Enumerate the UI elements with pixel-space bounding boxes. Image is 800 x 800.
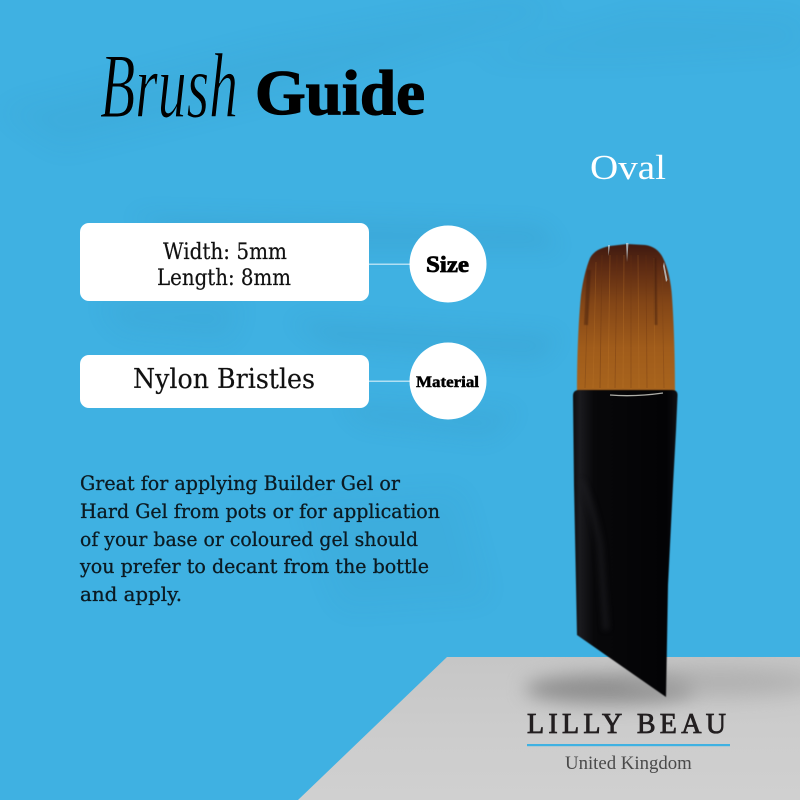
title bbox=[100, 35, 425, 137]
material panel bbox=[80, 355, 369, 408]
size connector bbox=[369, 264, 413, 265]
title script word: Brush bbox=[100, 35, 238, 137]
material panel: Nylon Bristles bbox=[133, 364, 315, 395]
title bold word: Guide bbox=[255, 57, 425, 128]
material badge bbox=[410, 342, 486, 420]
size values bbox=[157, 240, 291, 291]
bristle tip gaps bbox=[608, 243, 668, 282]
material connector bbox=[369, 380, 413, 382]
brush bbox=[573, 243, 678, 697]
material row bbox=[80, 342, 486, 420]
description: and apply. bbox=[80, 582, 182, 606]
ferrule bbox=[573, 390, 678, 697]
size panel bbox=[80, 223, 369, 301]
description: Great for applying Builder Gel or bbox=[80, 471, 400, 495]
description: you prefer to decant from the bottle bbox=[79, 554, 429, 578]
logo bbox=[527, 709, 730, 774]
floor shadow bbox=[525, 668, 800, 704]
logo location: United Kingdom bbox=[565, 753, 692, 774]
logo name: LILLY BEAU bbox=[527, 709, 730, 740]
material badge: Material bbox=[416, 374, 480, 391]
size badge: Size bbox=[426, 252, 469, 277]
size badge bbox=[410, 226, 486, 302]
grey floor bbox=[298, 657, 800, 800]
description bbox=[79, 471, 440, 606]
bristles bbox=[577, 243, 675, 392]
palm leaf shadows bbox=[0, 0, 800, 610]
size row bbox=[80, 223, 486, 302]
description: of your base or coloured gel should bbox=[80, 527, 418, 551]
ferrule highlight bbox=[610, 393, 663, 396]
description: Hard Gel from pots or for application bbox=[80, 499, 440, 523]
bristle dark roots bbox=[586, 258, 656, 325]
size values: Length: 8mm bbox=[157, 266, 291, 291]
brush name: Oval bbox=[590, 148, 666, 187]
ferrule reflection bbox=[591, 504, 608, 628]
logo rule bbox=[527, 744, 730, 746]
size values: Width: 5mm bbox=[163, 240, 287, 265]
